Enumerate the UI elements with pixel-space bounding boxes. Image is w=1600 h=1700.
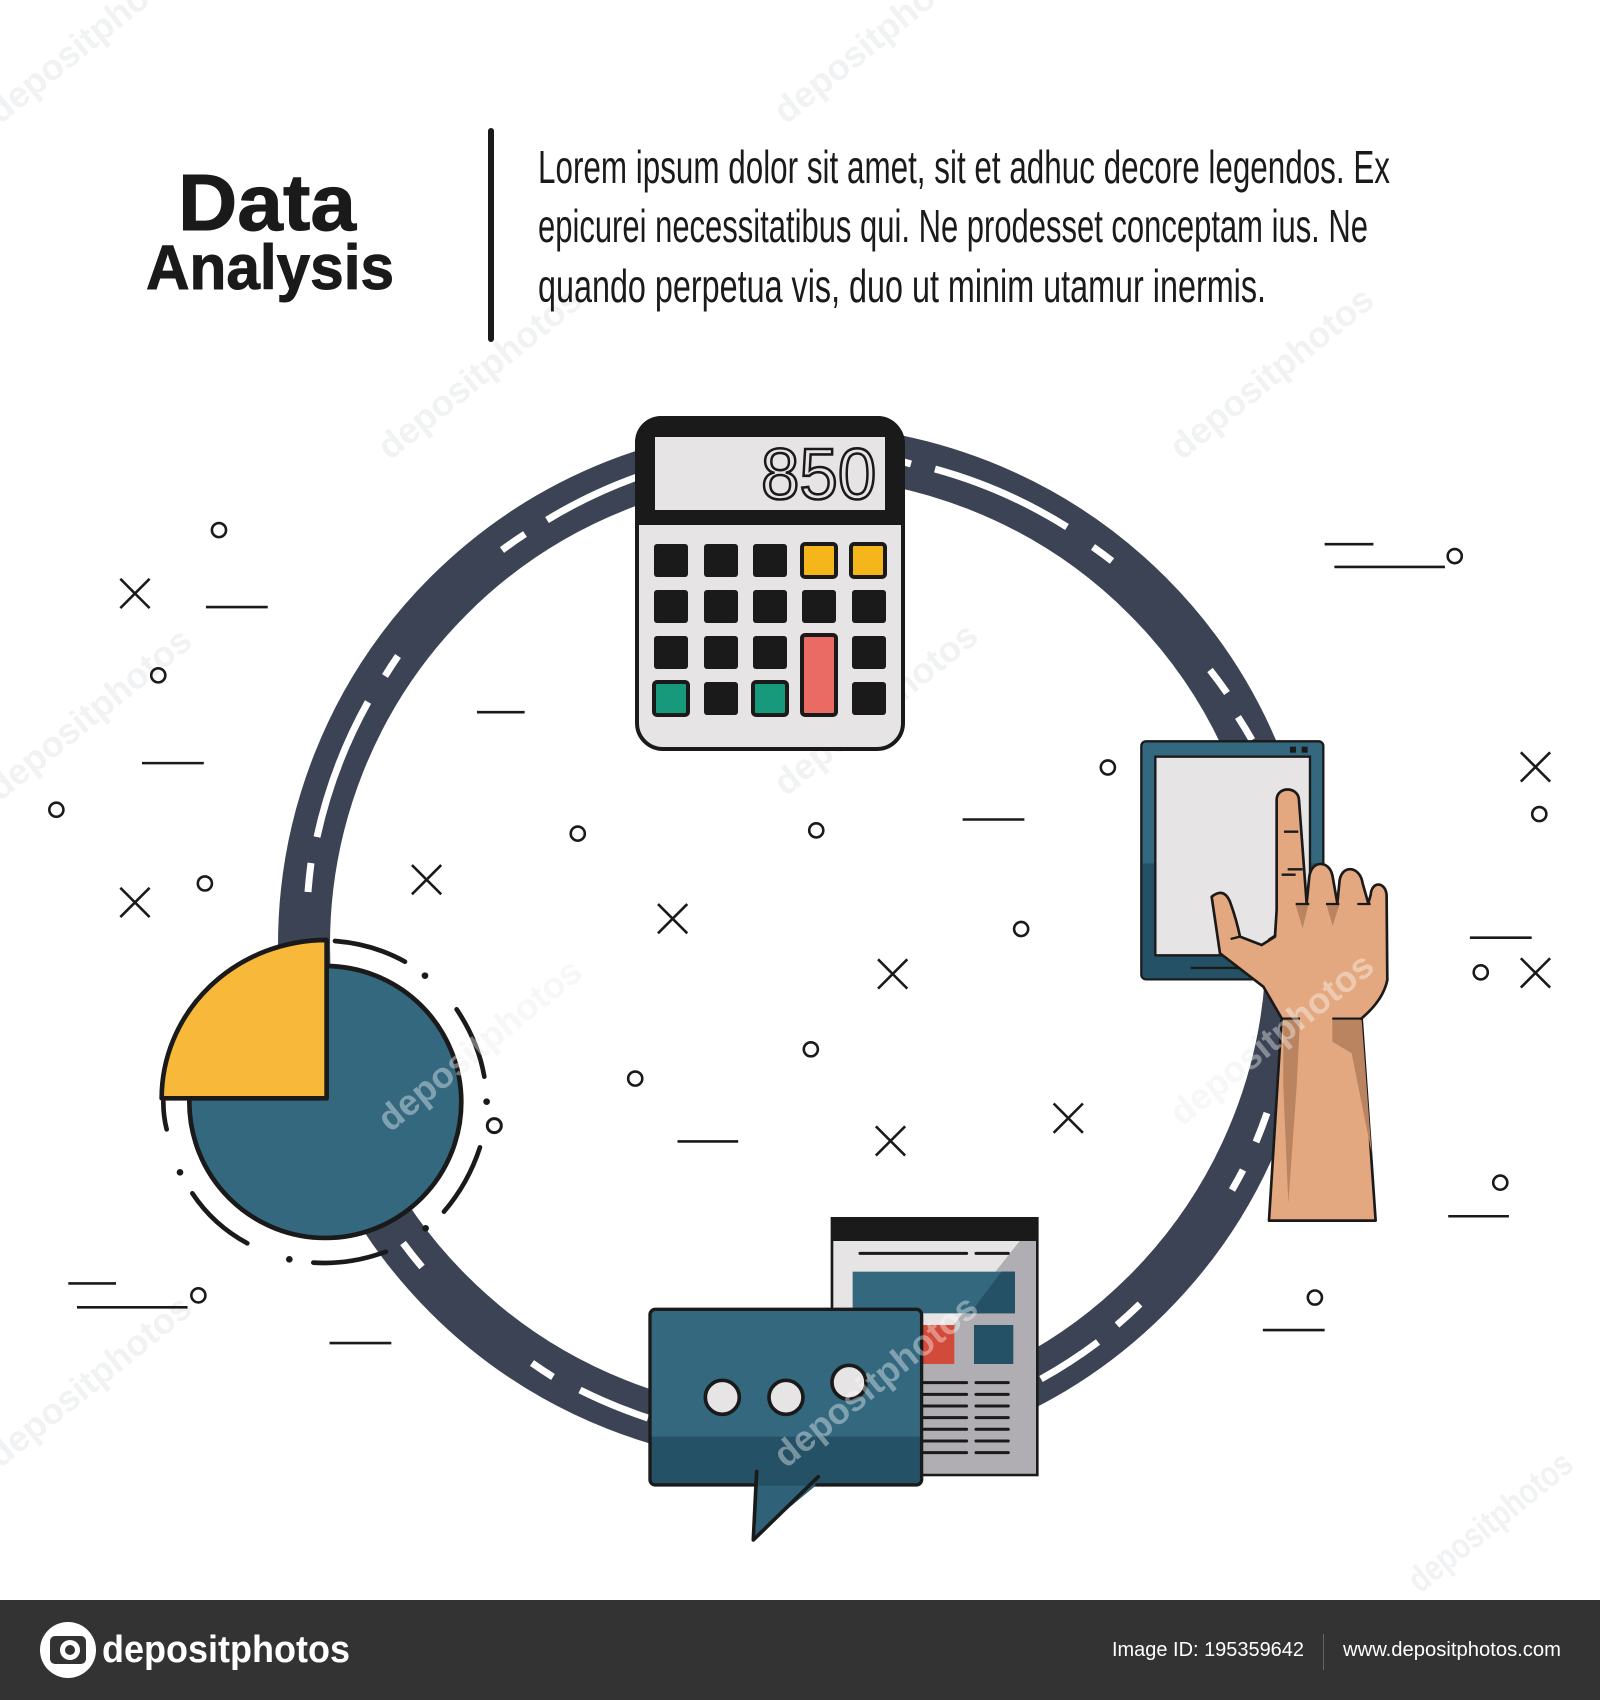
tablet (1141, 741, 1323, 979)
vertical divider (488, 128, 494, 342)
footer logo (40, 1622, 350, 1678)
watermark highlights over icons: depositphotos (765, 1286, 985, 1475)
footer image id: Image ID: 195359642 (1112, 1639, 1304, 1661)
pie yellow quadrant (162, 940, 327, 1098)
title: Data Analysis: Analysis (146, 233, 394, 303)
faint watermark layer: depositphotos (765, 1286, 985, 1475)
pie orbit arcs and dots (163, 941, 501, 1263)
faint watermark layer: depositphotos (369, 950, 589, 1139)
faint watermark layer: depositphotos (1161, 278, 1381, 467)
watermark highlights over icons (369, 944, 1381, 1475)
hand (1212, 789, 1387, 1221)
faint watermark layer: depositphotos (1161, 944, 1381, 1133)
icon: pie chart (162, 940, 501, 1263)
title: Data Analysis (146, 158, 394, 303)
icon: tablet with pointing hand (1141, 741, 1387, 1221)
speech bubble (650, 1309, 922, 1540)
calculator display number: 850 (761, 434, 876, 514)
title: Data Analysis: Data (178, 158, 357, 247)
watermark highlights over icons: depositphotos (1161, 944, 1381, 1133)
footer url: www.depositphotos.com (1342, 1639, 1561, 1661)
circular road (304, 451, 1292, 1439)
faint watermark layer: depositphotos (369, 278, 589, 467)
pie base slice (189, 966, 461, 1238)
footer bar (0, 1600, 1600, 1700)
intro paragraph: quando perpetua vis, duo ut minim utamur inermis. (538, 260, 1266, 312)
footer logo: depositphotos (102, 1629, 350, 1671)
newspaper document (831, 1218, 1038, 1475)
icon: calculator (635, 416, 904, 749)
decorative scatter: circles, crosses, dashes (49, 523, 1550, 1343)
icon: newspaper and speech bubble (650, 1218, 1038, 1540)
intro paragraph (538, 141, 1390, 312)
watermark highlights over icons: depositphotos (369, 950, 589, 1139)
faint watermark layer: depositphotos (765, 614, 985, 803)
